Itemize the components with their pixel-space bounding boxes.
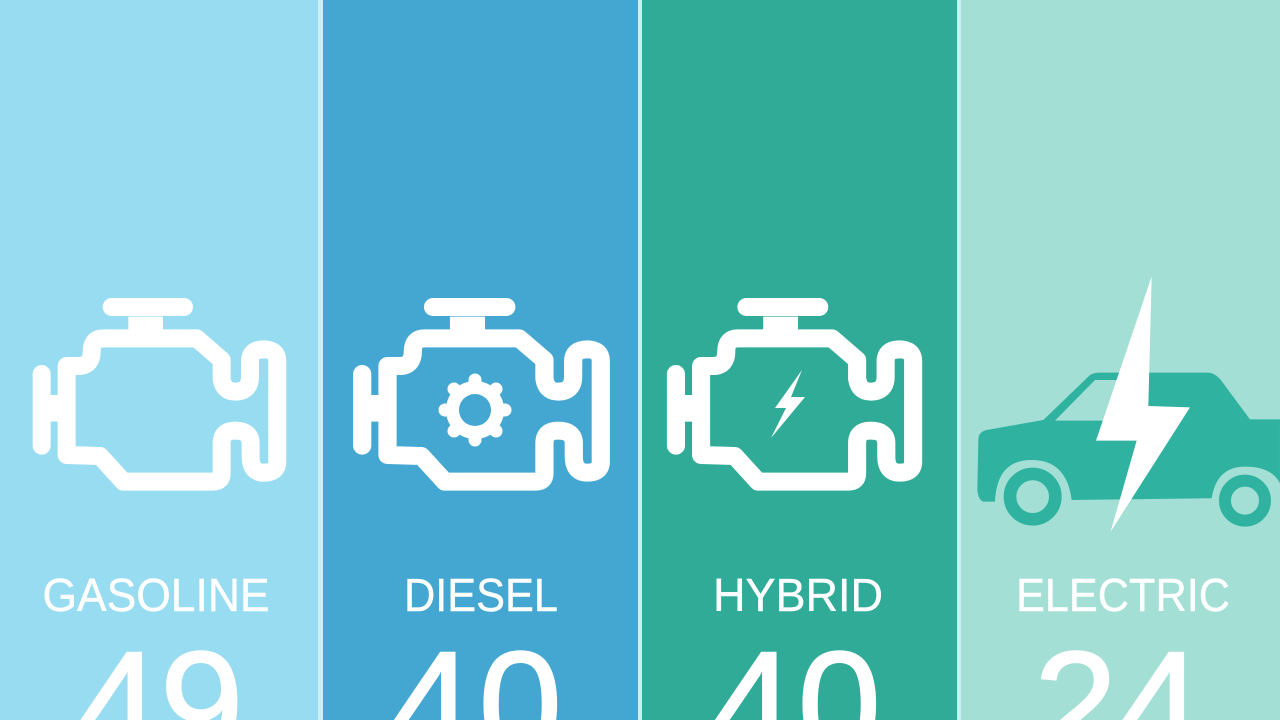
panel: electric <box>961 0 1280 720</box>
icon: engine with bolt <box>676 307 913 482</box>
panel: hybrid <box>642 0 957 720</box>
gear hole <box>459 394 491 426</box>
label: diesel: DIESEL <box>404 569 558 621</box>
label: hybrid: HYBRID <box>713 569 883 621</box>
panel: diesel <box>323 0 638 720</box>
icon: engine <box>42 307 277 482</box>
label: gasoline: GASOLINE <box>42 569 270 621</box>
icon: engine with gear <box>362 307 601 482</box>
panel: gasoline <box>0 0 318 720</box>
icon: electric car with bolt <box>977 277 1280 532</box>
label: electric: ELECTRIC <box>1016 569 1230 621</box>
